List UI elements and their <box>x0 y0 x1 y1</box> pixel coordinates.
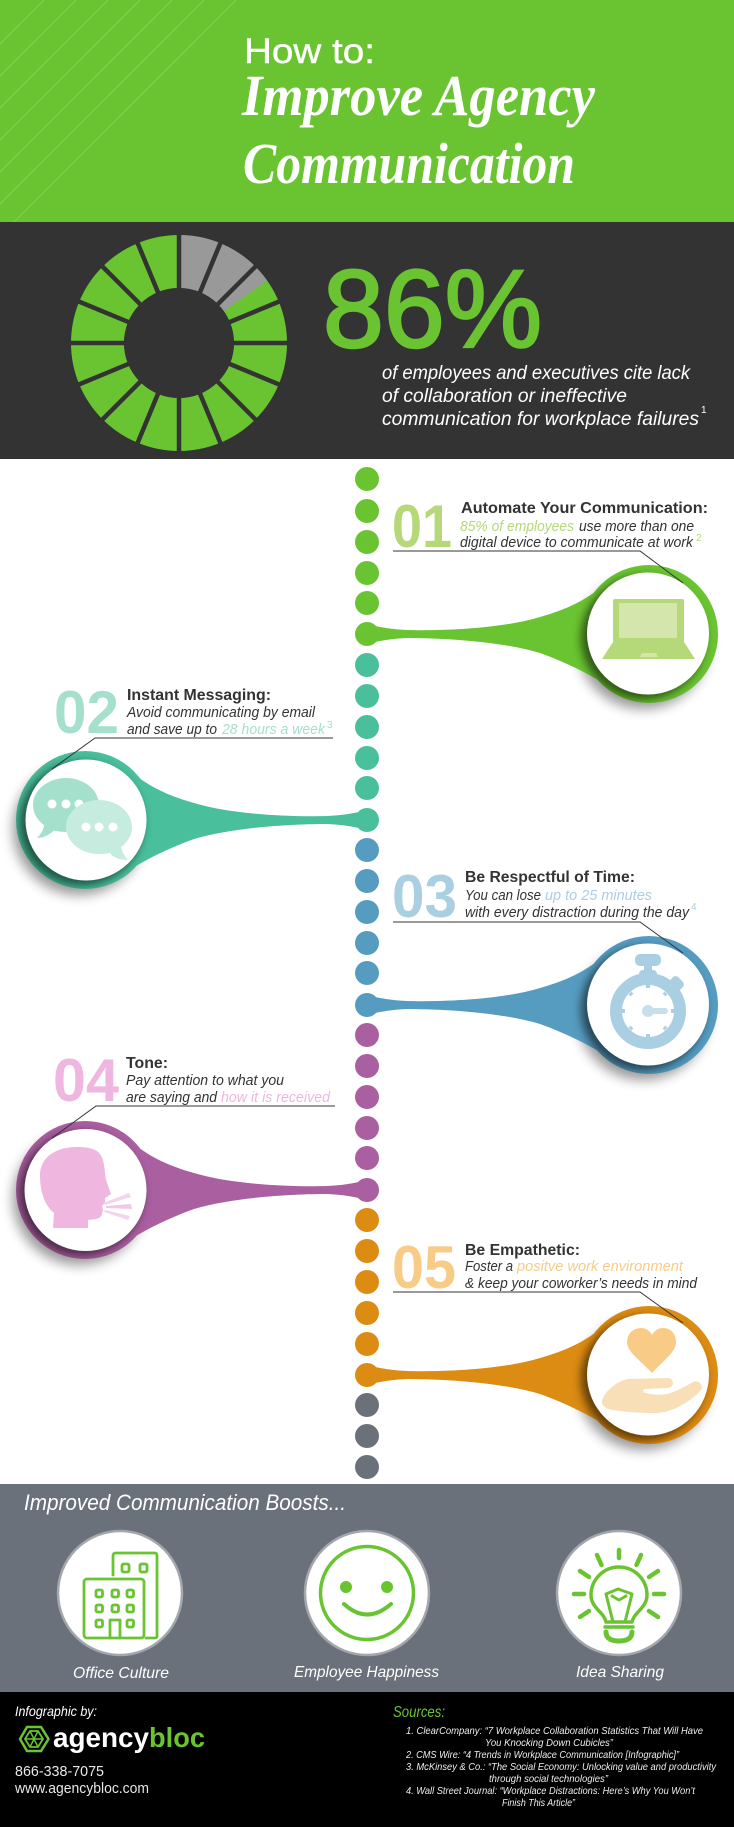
text block: & keep your coworker’s needs in mind <box>465 1276 698 1292</box>
heading: Instant Messaging: <box>127 687 271 704</box>
text block <box>126 1073 331 1106</box>
text block: Foster a <box>465 1259 513 1275</box>
icon: heart in hand <box>602 1328 702 1413</box>
timeline dots <box>355 467 379 1479</box>
item: employee happiness <box>294 1531 439 1681</box>
heading: Automate Your Communication: <box>461 500 708 517</box>
text block: Pay attention to what you <box>126 1073 284 1089</box>
text block: 2 <box>696 533 702 544</box>
leader line <box>52 1106 335 1138</box>
panel: step 04 tone <box>13 1047 366 1265</box>
icon: office buildings <box>84 1553 157 1638</box>
connector and ring <box>368 565 718 709</box>
text block: how it is received <box>221 1090 331 1106</box>
text block: up to 25 minutes <box>545 888 652 904</box>
icon: chat bubbles <box>33 778 132 860</box>
contact details: 866-338-7075 <box>15 1763 104 1780</box>
item: office culture <box>58 1531 182 1682</box>
text block <box>460 519 702 551</box>
step number: 01 <box>392 493 452 560</box>
icon: stopwatch <box>616 954 685 1043</box>
text block: 85% of employees <box>460 519 574 535</box>
contact details <box>14 1763 149 1797</box>
label: Idea Sharing <box>576 1664 664 1681</box>
text block: and save up to <box>127 722 217 738</box>
text block: are saying and <box>126 1090 218 1106</box>
section heading: Improved Communication Boosts... <box>24 1490 346 1515</box>
heading: Be Respectful of Time: <box>465 869 635 886</box>
sources list: You Knocking Down Cubicles” <box>485 1737 613 1749</box>
icon: smiley face <box>320 1546 414 1640</box>
text block <box>465 888 697 921</box>
icon: speaking head <box>40 1147 132 1228</box>
step number: 02 <box>54 679 119 746</box>
statistic description <box>382 363 707 430</box>
panel: header <box>0 0 734 222</box>
logo: agencybloc: agency <box>53 1722 149 1753</box>
donut chart <box>66 230 292 456</box>
connector and ring <box>368 1306 718 1450</box>
leader line <box>393 922 683 953</box>
step number: 03 <box>392 863 457 930</box>
sources list: through social technologies” <box>489 1773 608 1785</box>
step number: 04 <box>53 1047 120 1114</box>
text block: with every distraction during the day <box>465 905 690 921</box>
big number: 86% <box>323 248 542 371</box>
text block: positve work environment <box>516 1259 684 1275</box>
text block: 28 hours a week <box>221 722 326 738</box>
panel: 86 percent statistic <box>0 222 734 459</box>
sources list <box>405 1725 717 1809</box>
panel: footer <box>0 1692 734 1827</box>
text block <box>126 705 333 738</box>
sources list: 1. ClearCompany: “7 Workplace Collaboration Statistics That Will Have <box>406 1725 703 1737</box>
panel: step 05 empathetic <box>368 1234 718 1450</box>
heading: Tone: <box>126 1055 168 1072</box>
item: idea sharing <box>557 1531 681 1681</box>
leader line <box>393 551 683 583</box>
leader line <box>393 1292 683 1323</box>
text block <box>465 1259 698 1292</box>
step number: 05 <box>392 1234 456 1301</box>
sources list: Finish This Article” <box>502 1797 575 1809</box>
sources heading: Sources: <box>393 1704 445 1721</box>
panel: improved communication boosts <box>0 1484 734 1692</box>
text block: You can lose <box>465 888 541 904</box>
panel: step 03 respectful of time <box>368 863 718 1080</box>
statistic description: 1 <box>701 405 707 416</box>
statistic description: of collaboration or ineffective <box>382 386 627 407</box>
panel: step 01 automate <box>368 493 718 709</box>
connector and ring <box>13 1121 366 1265</box>
logo: agencybloc: bloc <box>149 1722 205 1753</box>
leader line <box>52 738 333 769</box>
title: improve agency: Improve Agency <box>241 63 595 128</box>
text block: Avoid communicating by email <box>126 705 316 721</box>
statistic description: communication for workplace failures <box>382 409 700 430</box>
sources list: 4. Wall Street Journal: “Workplace Distractions: Here’s Why You Won’t <box>406 1785 696 1797</box>
text block: digital device to communicate at work <box>460 535 694 551</box>
sources list: 2. CMS Wire: “4 Trends in Workplace Communication [Infographic]” <box>405 1749 679 1761</box>
panel: step 02 instant messaging <box>13 679 366 895</box>
contact details: www.agencybloc.com <box>14 1780 149 1797</box>
title: how to: How to: <box>244 32 375 71</box>
credit label: Infographic by: <box>15 1703 97 1719</box>
text block: 3 <box>327 720 333 731</box>
label: Employee Happiness <box>294 1664 439 1681</box>
icon: laptop <box>602 599 695 659</box>
text block: use more than one <box>579 519 694 535</box>
connector and ring <box>13 751 366 895</box>
statistic description: of employees and executives cite lack <box>382 363 691 384</box>
label: Office Culture <box>73 1665 169 1682</box>
connector and ring <box>368 936 718 1080</box>
title: communication: Communication <box>243 131 575 196</box>
text block: 4 <box>691 902 697 913</box>
heading: Be Empathetic: <box>465 1242 580 1259</box>
icon: light bulb <box>574 1550 664 1641</box>
logo: agencybloc <box>20 1722 205 1753</box>
